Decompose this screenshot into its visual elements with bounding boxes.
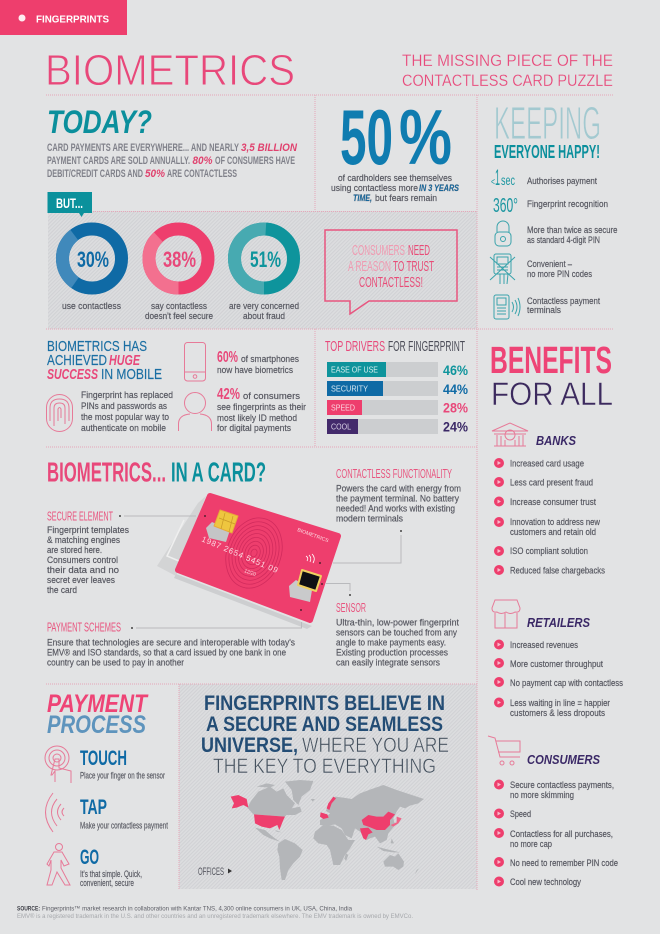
stat: under 1 second: sec — [501, 172, 515, 188]
bar: speed: SPEED — [331, 402, 355, 412]
list: banks benefits — [494, 458, 605, 576]
text block: 50 percent caption: of cardholders see themselves — [338, 172, 452, 183]
icon: padlock — [495, 221, 511, 246]
heading: success in mobile: IN MOBILE — [101, 367, 162, 383]
callout: payment schemes — [47, 609, 302, 668]
callout: sensor: can easily integrate sensors — [336, 656, 440, 668]
text block: 42 percent consumers: most likely ID method — [217, 412, 297, 423]
text block: 42 percent consumers: 42% — [217, 386, 240, 403]
callout: reason to trust: NEED — [408, 242, 430, 259]
bar: security: 44% — [443, 381, 468, 397]
callout: contactless functionality — [319, 467, 461, 564]
list: banks benefits: Less card present fraud — [510, 476, 593, 488]
callout tab: but: BUT... — [56, 195, 83, 211]
chart: world map of offices — [231, 780, 424, 880]
text block: 60 percent smartphones: of smartphones — [241, 353, 299, 364]
list: consumers benefits: Speed — [510, 808, 531, 819]
icon: person — [178, 392, 212, 431]
text block: 60 percent smartphones: 60% — [217, 349, 238, 366]
stat: under 1 second — [491, 165, 515, 190]
icon: tap waves — [46, 793, 64, 832]
subtitle — [402, 52, 613, 90]
card brand: BIOMETRICS — [296, 527, 330, 544]
sensor — [289, 580, 312, 602]
text block: 50 percent caption: IN 3 YEARS — [419, 182, 460, 193]
stat: 360 degrees: 360° — [493, 195, 518, 217]
step: touch: Place your finger on the sensor — [80, 770, 165, 782]
heading: payment process: PAYMENT — [47, 690, 149, 718]
text block: fingerprint replaced PINs: PINs and passwords as — [81, 400, 167, 411]
bar: security — [327, 381, 468, 397]
step: tap: TAP — [80, 796, 107, 819]
text block: 60 percent smartphones: now have biometrics — [217, 364, 293, 375]
step: go: It's that simple. Quick, — [80, 869, 142, 880]
list: banks benefits: ISO compliant solution — [510, 545, 588, 556]
heading: for all: FOR ALL — [491, 376, 613, 412]
list: retailers benefits: Less waiting in line = happier — [510, 697, 610, 708]
callout: secure element: their data and no — [47, 564, 119, 575]
bar: speed: 28% — [443, 400, 468, 416]
icon: shopping cart — [488, 736, 520, 765]
heading: payment process — [47, 690, 149, 739]
text block: card payments: 80% — [192, 155, 213, 167]
label: say contactless — [145, 300, 213, 321]
panel: keeping everyone happy — [490, 97, 618, 319]
callout: payment schemes: Ensure that technologies are secure and interoperable with today's — [47, 636, 295, 648]
step: go: GO — [80, 846, 99, 869]
label: convenient — [527, 258, 592, 279]
heading: top drivers: FOR FINGERPRINT — [388, 338, 465, 355]
heading: success in mobile: ACHIEVED — [47, 353, 107, 369]
callout: secure element — [47, 510, 206, 595]
chart: 30 percent donut — [51, 217, 133, 300]
header badge: Fingerprints logo — [0, 0, 127, 35]
heading: success in mobile: BIOMETRICS HAS — [47, 339, 147, 355]
text block: fingerprint replaced PINs: the most popular way to — [81, 411, 169, 422]
step: go: convenient, secure — [80, 878, 134, 889]
icon: fingerprint — [46, 394, 72, 432]
callout: sensor: angle to make payments easy. — [336, 636, 446, 648]
list: retailers benefits: Increased revenues — [510, 639, 578, 650]
chart: 38 percent donut — [149, 229, 208, 288]
step: go — [80, 846, 142, 889]
heading: success in mobile — [47, 339, 162, 383]
list: consumers benefits: no more skimming — [510, 789, 574, 800]
label: use contactless: use contactless — [62, 300, 121, 311]
label: fingerprint recognition: Fingerprint recognition — [527, 198, 608, 209]
heading: secure and seamless universe: WHERE YOU ARE — [302, 733, 449, 757]
callout: secure element: are stored here. — [47, 544, 102, 555]
text block: card payments — [47, 142, 297, 180]
label: more secure: More than twice as secure — [527, 224, 618, 235]
text block: 50 percent caption: TIME, — [353, 192, 372, 203]
title: BIOMETRICS — [45, 46, 295, 95]
callout: secure element: the card — [47, 584, 77, 595]
card expiry: 12/20 — [243, 568, 257, 578]
bar: ease of use: 46% — [443, 362, 468, 378]
list: consumers benefits: no more cap — [510, 838, 552, 849]
label: convenient: no more PIN codes — [527, 268, 592, 279]
bar: security: SECURITY — [331, 384, 368, 394]
chart: 51 percent donut: 51% — [250, 247, 281, 272]
bar: cool: COOL — [331, 422, 351, 432]
footer: source notes: SOURCE: — [17, 906, 40, 912]
label: contactless terminals: Contactless payment — [527, 295, 600, 306]
stat: under 1 second: < — [491, 177, 495, 188]
list: banks benefits: customers and retain old — [510, 526, 596, 537]
label: very concerned: are very concerned — [229, 300, 299, 311]
label: say contactless: say contactless — [151, 300, 207, 311]
label: contactless terminals — [527, 295, 600, 315]
heading: success in mobile: HUGE — [109, 353, 141, 369]
icon: shop — [492, 600, 520, 628]
heading: success in mobile: SUCCESS — [47, 367, 98, 383]
chart: 38 percent donut: 38% — [163, 247, 196, 272]
callout: sensor: Ultra-thin, low-power fingerprint — [336, 616, 459, 628]
contactless symbol — [306, 554, 314, 563]
footer: source notes — [17, 906, 413, 920]
step: touch: TOUCH — [80, 747, 127, 770]
label: offices: OFFICES — [198, 866, 224, 878]
callout: reason to trust: TO TRUST — [393, 258, 434, 275]
label: contactless terminals: terminals — [527, 304, 561, 315]
step: tap: Make your contactless payment — [80, 820, 168, 832]
text block: 42 percent consumers: see fingerprints as their — [217, 401, 306, 412]
card number: 1987 2654 5451 09 — [200, 535, 280, 575]
callout: contactless functionality: modern terminals — [336, 512, 403, 524]
callout: secure element: secret ever leaves — [47, 574, 115, 585]
bar: ease of use — [327, 362, 468, 378]
heading: today: TODAY? — [47, 104, 152, 140]
subtitle: CONTACTLESS CARD PUZZLE — [402, 72, 613, 90]
panel: today — [47, 104, 297, 180]
icon: bank — [492, 423, 528, 446]
callout: reason to trust: CONSUMERS — [352, 242, 405, 259]
text block: card payments: CARD PAYMENTS ARE EVERYWHERE... AND NEARLY — [47, 142, 240, 154]
callout: secure element: & matching engines — [47, 534, 120, 545]
label: say contactless: doesn't feel secure — [145, 310, 213, 321]
heading: banks: BANKS — [536, 434, 577, 448]
list: retailers benefits: No payment cap with contactless — [510, 677, 623, 688]
callout: payment schemes: EMV® and ISO standards, so that a card issued by one bank in one — [47, 646, 286, 658]
callout: contactless functionality: the payment terminal. No battery — [336, 492, 459, 504]
list: banks benefits: Reduced false chargebacks — [510, 564, 605, 576]
label: authorises: Authorises payment — [527, 175, 597, 186]
list: banks benefits: Increase consumer trust — [510, 496, 596, 507]
icon: walking person — [47, 844, 70, 885]
text block: 42 percent consumers: for digital payments — [217, 422, 291, 433]
text block: card payments: 3,5 BILLION — [241, 142, 297, 154]
icon: touch — [45, 746, 71, 783]
text block: fingerprint replaced PINs — [81, 389, 173, 433]
callout tab: but — [48, 192, 92, 217]
text block: card payments: 50% — [145, 168, 165, 180]
stat: 50 percent: 50 — [340, 93, 393, 181]
callout: secure element: Fingerprint templates — [47, 524, 129, 535]
callout: sensor: Existing production processes — [336, 646, 448, 658]
heading: secure and seamless universe — [201, 691, 449, 778]
chart: 51 percent donut — [234, 229, 294, 288]
bar: cool: 24% — [443, 418, 468, 434]
text block: card payments: ARE CONTACTLESS — [167, 168, 237, 180]
list: retailers benefits: customers & less dropouts — [510, 707, 605, 718]
label: very concerned: about fraud — [243, 310, 285, 321]
heading: biometrics in a card: BIOMETRICS... — [47, 456, 166, 488]
header badge: Fingerprints logo: FINGERPRINTS — [36, 14, 109, 26]
icon: contactless terminal — [494, 295, 520, 319]
list: banks benefits: Innovation to address new — [510, 516, 600, 527]
heading: secure and seamless universe: A SECURE AND SEAMLESS — [206, 712, 443, 736]
callout: sensor: SENSOR — [336, 601, 366, 615]
bar: cool — [327, 418, 468, 434]
text block: 50 percent caption — [331, 172, 460, 203]
stat: under 1 second: 1 — [495, 165, 500, 190]
heading: secure and seamless universe: FINGERPRINTS BELIEVE IN — [204, 691, 445, 715]
list: consumers benefits: Secure contactless payments, — [510, 779, 614, 790]
label: more secure: as standard 4-digit PIN — [527, 234, 600, 245]
heading: biometrics in a card: IN A CARD? — [171, 456, 266, 488]
callout: secure element: Consumers control — [47, 554, 118, 565]
illustration: biometric card — [157, 496, 338, 629]
heading: retailers: RETAILERS — [527, 616, 591, 630]
subtitle: THE MISSING PIECE OF THE — [402, 52, 613, 70]
text block: 60 percent smartphones — [217, 349, 299, 375]
label: very concerned — [229, 300, 299, 321]
footer: source notes: Fingerprints™ market research in collaboration with Kantar TNS, 4,300 online consumers in UK, USA, China, India — [42, 906, 352, 912]
text block: 42 percent consumers: of consumers — [243, 390, 300, 401]
callout: sensor: sensors can be touched from any — [336, 626, 457, 638]
label: more secure — [527, 224, 618, 245]
heading: top drivers: TOP DRIVERS — [325, 338, 385, 355]
callout: contactless functionality: needed! And works with existing — [336, 502, 455, 514]
list: consumers benefits — [494, 779, 618, 887]
fingerprint pattern — [216, 510, 292, 596]
chip — [206, 522, 230, 542]
stat: 50 percent — [331, 93, 460, 203]
panel: payment process — [45, 690, 168, 889]
step: tap — [80, 796, 168, 832]
callout: payment schemes: country can be used to pay in another — [47, 656, 184, 668]
text block: fingerprint replaced PINs: Fingerprint has replaced — [81, 389, 173, 400]
text block: 50 percent caption: using contactless more — [331, 182, 418, 193]
bar: ease of use: EASE OF USE — [331, 364, 378, 374]
text block: 50 percent caption: but fears remain — [375, 192, 437, 203]
callout: reason to trust — [325, 230, 457, 314]
text block: card payments: DEBIT/CREDIT CARDS AND — [47, 168, 143, 180]
footer: source notes: EMV® is a registered trademark in the U.S. and other countries and an unregistered trademark elsewhere. The EMV trademark is owned by EMVCo. — [17, 912, 413, 920]
bar: speed — [327, 400, 468, 416]
panel: benefits for all — [488, 340, 623, 887]
icon: smartphone — [184, 342, 206, 381]
text block: card payments: OF CONSUMERS HAVE — [215, 155, 295, 167]
list: retailers benefits — [494, 639, 623, 718]
callout: contactless functionality: CONTACTLESS FUNCTIONALITY — [336, 467, 452, 481]
text block: card payments: PAYMENT CARDS ARE SOLD ANNUALLY. — [47, 155, 190, 167]
text block: 42 percent consumers — [217, 386, 306, 433]
stat: 50 percent: % — [399, 93, 452, 181]
list: banks benefits: Increased card usage — [510, 458, 584, 468]
callout: payment schemes: PAYMENT SCHEMES — [47, 620, 121, 634]
list: retailers benefits: More customer throughput — [510, 658, 603, 669]
callout: contactless functionality: Powers the card with energy from — [336, 482, 461, 494]
list: consumers benefits: Cool new technology — [510, 876, 581, 887]
callout: reason to trust: CONTACTLESS! — [359, 274, 423, 291]
heading: consumers: CONSUMERS — [527, 753, 601, 767]
callout: reason to trust: A REASON — [348, 258, 391, 275]
callout: sensor — [321, 583, 459, 668]
panel: top drivers chart — [325, 338, 468, 434]
chart: 30 percent donut: 30% — [77, 247, 109, 272]
list: consumers benefits: No need to remember PIN code — [510, 857, 618, 868]
callout: secure element: SECURE ELEMENT — [47, 510, 113, 524]
heading: payment process: PROCESS — [47, 711, 146, 739]
list: consumers benefits: Contactless for all purchases, — [510, 828, 613, 839]
text block: fingerprint replaced PINs: authenticate on mobile — [81, 422, 166, 433]
label: convenient: Convenient – — [527, 258, 573, 269]
heading: secure and seamless universe: THE KEY TO EVERYTHING — [213, 754, 436, 778]
panel: success in mobile — [46, 339, 306, 433]
step: touch — [80, 747, 165, 782]
icon: crossed out PIN pad — [490, 254, 515, 284]
heading: secure and seamless universe: UNIVERSE, — [201, 733, 298, 757]
